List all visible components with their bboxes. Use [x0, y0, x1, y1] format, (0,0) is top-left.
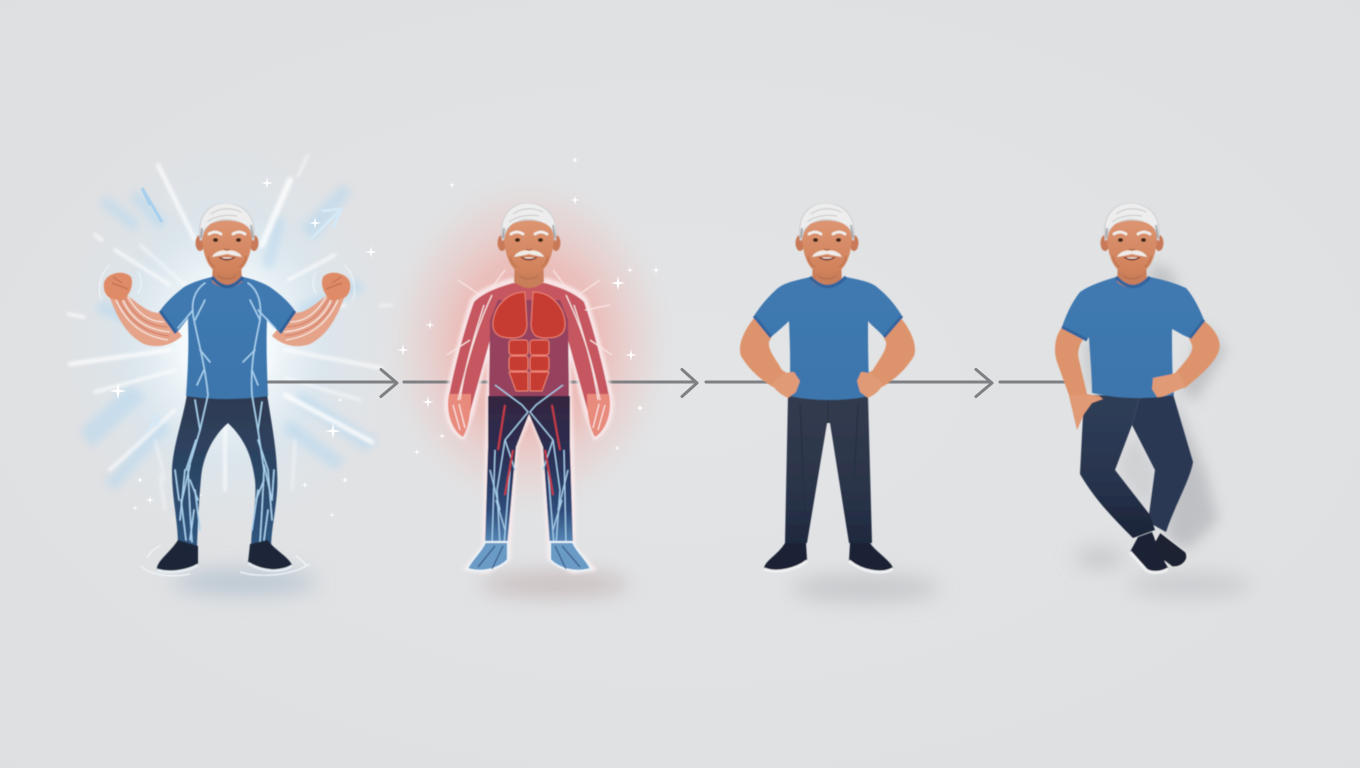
organs: lungs	[493, 292, 565, 338]
feet	[467, 542, 591, 571]
vessels	[447, 270, 612, 430]
arrow: stage 2 to stage 3	[404, 370, 697, 396]
hands	[1069, 372, 1186, 430]
organs: abdominal muscles	[509, 340, 549, 391]
legs	[485, 396, 573, 547]
hands	[772, 372, 883, 398]
figure 1: energised man with blue lightning	[99, 203, 355, 576]
arrow: stage 1 to stage 2	[262, 370, 397, 396]
glow: blue energy burst	[62, 140, 392, 540]
ripples	[141, 546, 310, 576]
shoes	[1130, 532, 1187, 573]
icon: fists	[104, 273, 350, 301]
wall shadow: fourth figure	[1085, 262, 1226, 550]
arms	[740, 316, 915, 388]
icon: arrow sparks	[110, 177, 377, 518]
shirt	[754, 277, 902, 400]
torso and arms	[449, 283, 609, 412]
arrow: stage 4 lead-in	[1000, 380, 1070, 384]
front leg	[1080, 395, 1155, 538]
back leg	[1132, 394, 1193, 532]
figure 2: anatomy man with red organs	[446, 203, 612, 572]
pants	[172, 394, 277, 546]
shirt	[160, 277, 295, 399]
arrow: stage 3 to stage 4	[706, 370, 992, 396]
shirt	[1062, 277, 1204, 398]
body glow outline	[446, 280, 612, 572]
veins: lightning	[175, 283, 275, 542]
arms	[99, 265, 355, 346]
pants	[785, 396, 872, 543]
figure 3: man standing with hands on hips	[740, 203, 915, 572]
shoes	[764, 543, 893, 572]
figure 4: man leaning on wall with crossed legs	[1055, 203, 1220, 573]
floor shadows	[173, 548, 1252, 602]
shoes	[157, 540, 292, 572]
arms	[1055, 320, 1220, 398]
glow: red energy aura	[381, 156, 677, 520]
